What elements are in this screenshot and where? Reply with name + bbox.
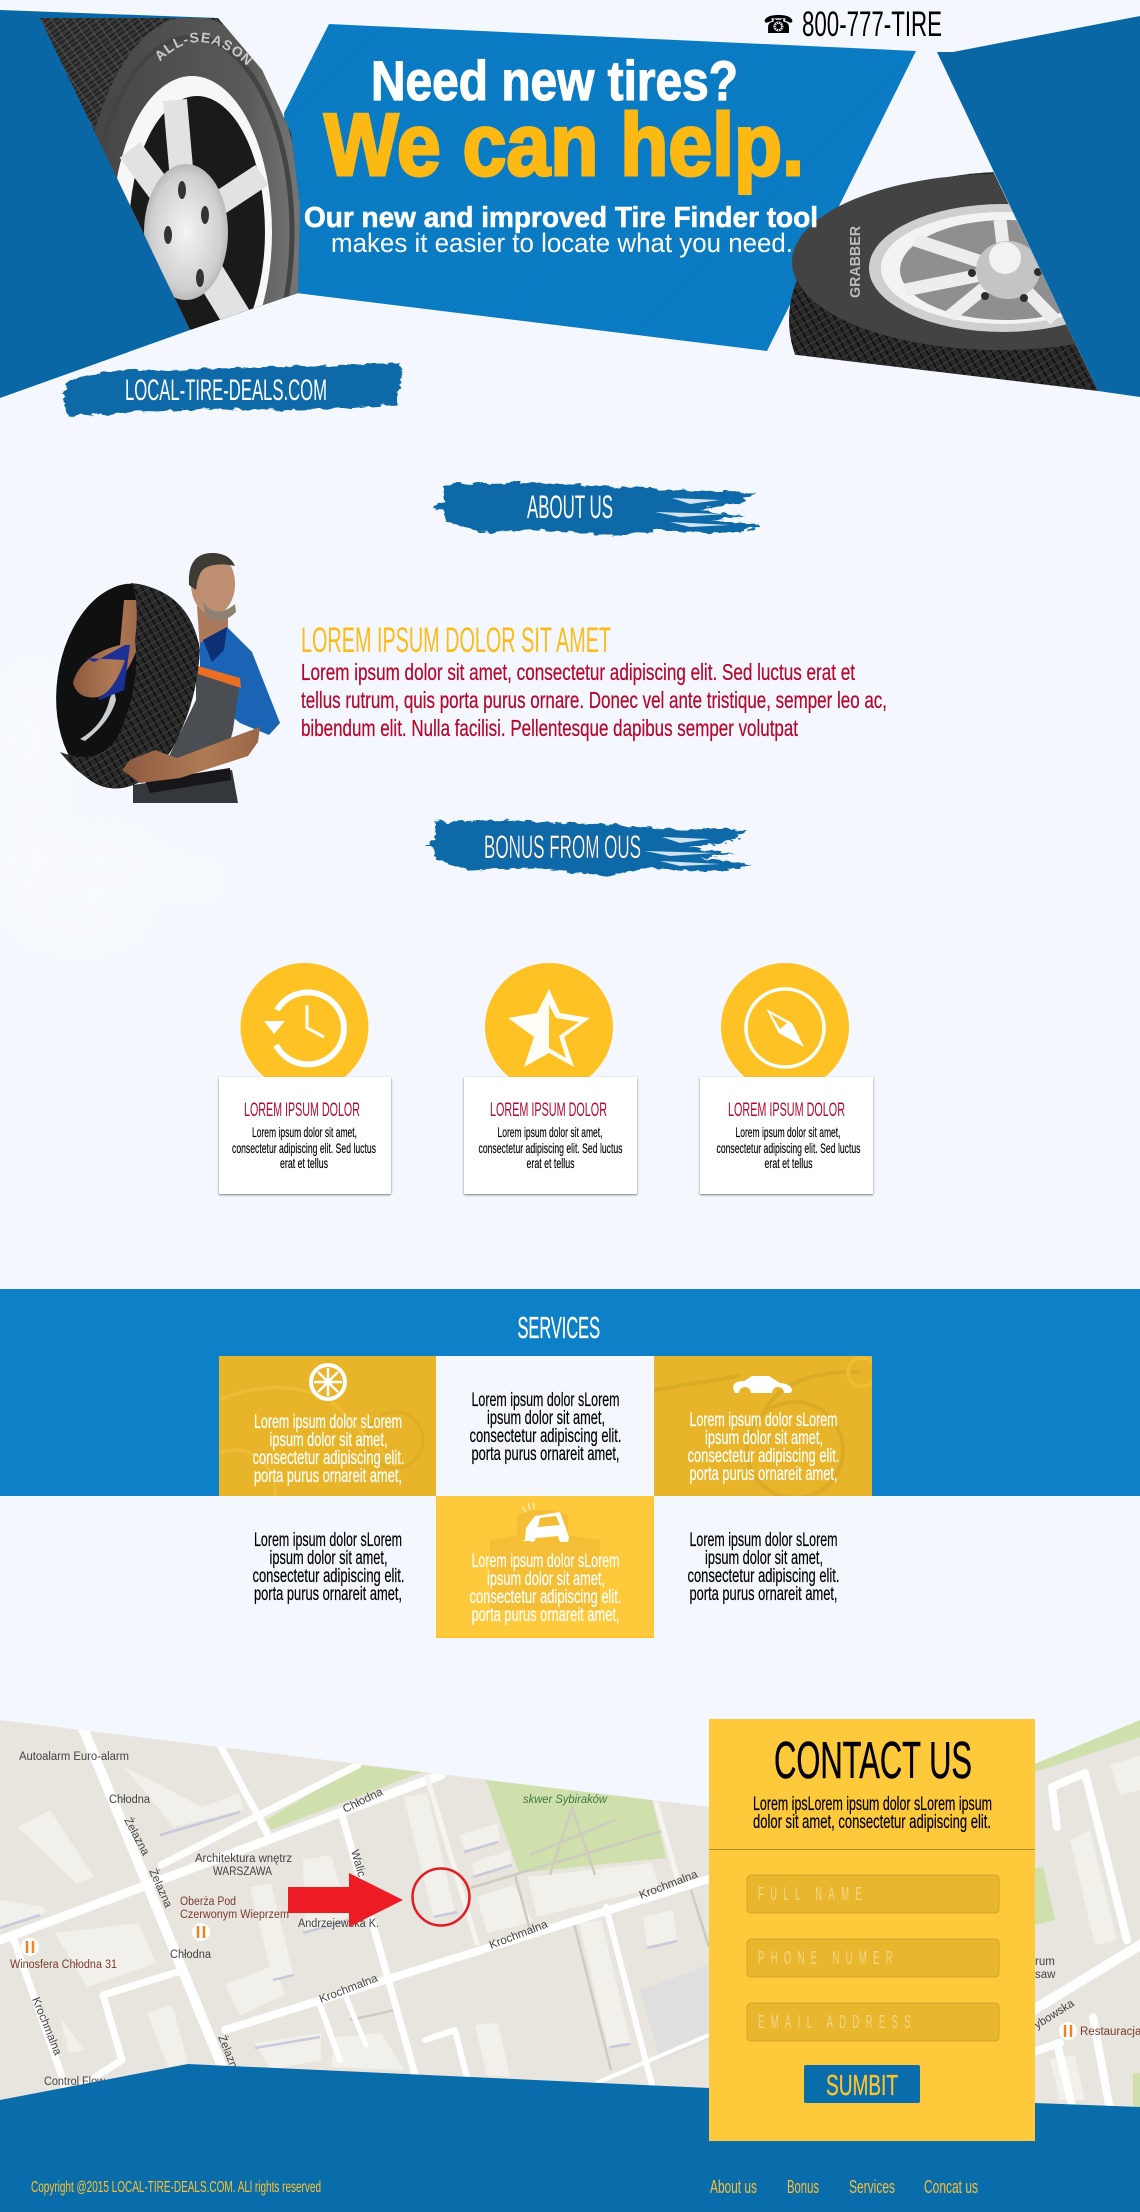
- card text: [716, 1124, 860, 1171]
- services band: [0, 1289, 1140, 1496]
- bonus card 3: [700, 963, 873, 1194]
- icon circle: clock: [240, 963, 368, 1077]
- map labels: Autoalarm Euro-alarm: [19, 1751, 129, 1763]
- card text: erat et tellus: [526, 1155, 574, 1171]
- service tile 6: porta purus ornareit amet,: [690, 1584, 838, 1605]
- about heading: LOREM IPSUM DOLOR SIT AMET: [301, 621, 611, 660]
- footer navigation: Bonus: [787, 2177, 819, 2197]
- crash icon: [522, 1503, 569, 1542]
- tile text: consectetur adipiscing elit.: [470, 1587, 622, 1608]
- headline: we can help: We can help.: [324, 95, 804, 194]
- copyright: Copyright @2015 LOCAL-TIRE-DEALS.COM. ALl rights reserved: [31, 2179, 321, 2196]
- map labels: skwer Sybiraków: [523, 1794, 608, 1806]
- tire body: [43, 575, 205, 797]
- map roads: [0, 1728, 1140, 2110]
- input: full name: [747, 1875, 999, 1913]
- map labels: Winosfera Chłodna 31: [10, 1959, 117, 1971]
- input: email address: [747, 2003, 999, 2041]
- location circle: [412, 1868, 470, 1926]
- left dark blue shape: [0, 10, 298, 398]
- card body: [464, 1077, 637, 1194]
- map labels: Walic: [348, 1849, 367, 1879]
- card body: [700, 1077, 873, 1194]
- section heading: bonus from ous: BONUS FROM OUS: [484, 829, 641, 865]
- service tile 6: ipsum dolor sit amet,: [705, 1548, 823, 1569]
- tile text: Lorem ipsum dolor sLorem: [254, 1412, 402, 1433]
- map buildings: [0, 1755, 1140, 2100]
- head: [191, 553, 235, 615]
- tile text: consectetur adipiscing elit.: [252, 1448, 404, 1469]
- service tile 5: [436, 1496, 654, 1638]
- service tile 4: [252, 1530, 404, 1605]
- tile text: porta purus ornareit amet,: [690, 1464, 838, 1485]
- right dark blue shape: [937, 16, 1140, 397]
- neck: [197, 606, 228, 650]
- map labels: Czerwonym Wieprzem: [180, 1909, 289, 1921]
- bonus card 1: [219, 963, 391, 1194]
- footer navigation: [710, 2177, 978, 2197]
- map labels: Chłodna: [170, 1949, 212, 1961]
- contact panel: [709, 1719, 1035, 2141]
- left tire photo: ALL-SEASON: [156, 32, 252, 66]
- card text: [478, 1124, 622, 1171]
- location arrow: [288, 1873, 403, 1927]
- contact text: dolor sit amet, consectetur adipiscing elit.: [753, 1812, 991, 1833]
- about text block: [301, 621, 887, 741]
- map labels: ybowska: [1032, 1997, 1077, 2032]
- tile text: consectetur adipiscing elit.: [688, 1446, 840, 1467]
- service tile 4: consectetur adipiscing elit.: [252, 1566, 404, 1587]
- arm holding tire: [73, 600, 142, 697]
- map labels: Architektura wnętrz: [195, 1853, 292, 1865]
- map labels: Chłodna: [109, 1794, 151, 1806]
- tile text: [252, 1412, 404, 1487]
- tile text: [688, 1410, 840, 1485]
- map pins: [21, 1923, 1077, 2040]
- service tile 6: consectetur adipiscing elit.: [688, 1566, 840, 1587]
- input: phone number: [747, 1939, 999, 1977]
- card text: consectetur adipiscing elit. Sed luctus: [232, 1140, 376, 1156]
- map labels: Andrzejewska K.: [298, 1918, 379, 1930]
- map building shadows: [0, 1812, 677, 2048]
- tile text: porta purus ornareit amet,: [472, 1605, 620, 1626]
- icon circle: star: [485, 963, 613, 1077]
- service tile 4: ipsum dolor sit amet,: [270, 1548, 388, 1569]
- tile text: ipsum dolor sit amet,: [705, 1428, 823, 1449]
- map labels: rum: [1035, 1956, 1055, 1968]
- hero header: [0, 5, 1140, 417]
- map paths: [350, 1808, 709, 2070]
- card text: Lorem ipsum dolor sit amet,: [498, 1124, 602, 1140]
- service tile 2: consectetur adipiscing elit.: [470, 1426, 622, 1447]
- card body: [219, 1077, 391, 1194]
- tile text: ipsum dolor sit amet,: [487, 1569, 605, 1590]
- service tile 6: [688, 1530, 840, 1605]
- wheel icon: [311, 1365, 345, 1399]
- headline: need new tires: Need new tires?: [371, 49, 738, 112]
- contact divider: [709, 1849, 1035, 1850]
- submit button: [804, 2065, 920, 2103]
- footer navigation: Concat us: [924, 2177, 978, 2197]
- right tire photo: [789, 172, 1098, 391]
- footer band: [0, 2064, 1140, 2212]
- map labels: Żelazna: [121, 1815, 152, 1858]
- tile text: [470, 1551, 622, 1626]
- faint mottled background patch: [0, 660, 226, 949]
- map labels: Żelazna: [146, 1867, 175, 1910]
- contact text: [753, 1794, 992, 1833]
- left tire photo: [40, 18, 300, 330]
- map labels: Oberża Pod: [180, 1896, 236, 1908]
- contact text: Lorem ipsLorem ipsum dolor sLorem ipsum: [753, 1794, 992, 1815]
- map: [0, 1700, 1140, 2120]
- input: phone number: PHONE NUMER: [758, 1948, 899, 1968]
- service tile 4: porta purus ornareit amet,: [254, 1584, 402, 1605]
- subheadline regular: makes it easier to locate what you need.: [331, 228, 793, 258]
- sleeve: [86, 645, 130, 700]
- card title: LOREM IPSUM DOLOR: [244, 1100, 360, 1121]
- tile text: Lorem ipsum dolor sLorem: [472, 1551, 620, 1572]
- bonus card 2: [464, 963, 637, 1194]
- card text: erat et tellus: [764, 1155, 812, 1171]
- card text: [232, 1124, 376, 1171]
- tile text: Lorem ipsum dolor sLorem: [690, 1410, 838, 1431]
- tile text: ipsum dolor sit amet,: [270, 1430, 388, 1451]
- services heading: SERVICES: [518, 1310, 600, 1345]
- map labels: Restauracja: [1080, 2026, 1140, 2038]
- card text: consectetur adipiscing elit. Sed luctus: [478, 1140, 622, 1156]
- footer navigation: About us: [710, 2177, 757, 2197]
- input: full name: FULL NAME: [758, 1884, 868, 1904]
- map labels: Krochmalna: [488, 1918, 550, 1952]
- map labels: Krochmalna: [318, 1972, 380, 2006]
- map labels: [10, 1751, 1140, 2088]
- section heading: about us: ABOUT US: [527, 489, 613, 525]
- service tile 3: [654, 1356, 876, 1498]
- card text: Lorem ipsum dolor sit amet,: [252, 1124, 357, 1140]
- trousers and belt: [133, 770, 238, 803]
- section heading: about us: [434, 482, 761, 536]
- card text: Lorem ipsum dolor sit amet,: [736, 1124, 840, 1140]
- brand brush: [64, 363, 402, 416]
- service tile 1: [219, 1356, 436, 1496]
- white rim sliver: [80, 690, 116, 741]
- map labels: Control Flow: [44, 2076, 106, 2088]
- card title: LOREM IPSUM DOLOR: [728, 1100, 845, 1121]
- service tile 2: ipsum dolor sit amet,: [487, 1408, 605, 1429]
- map labels: Krochmalna: [29, 1996, 64, 2058]
- shirt: [200, 627, 280, 735]
- about photo: mechanic with tire: [43, 553, 280, 803]
- about paragraph: tellus rutrum, quis porta purus ornare. Donec vel ante tristique, semper leo ac,: [301, 687, 887, 713]
- map labels: Chłodna: [341, 1786, 385, 1816]
- services section: [0, 1289, 1140, 1638]
- map labels: saw: [1035, 1969, 1056, 1981]
- brand name: LOCAL-TIRE-DEALS.COM: [125, 374, 327, 407]
- icon circle: compass: [721, 963, 849, 1077]
- map labels: Krochmalna: [638, 1868, 700, 1902]
- input: email address: EMAIL ADDRESS: [758, 2012, 917, 2032]
- contact heading: CONTACT US: [774, 1732, 972, 1790]
- service tile 2: [436, 1356, 654, 1496]
- card text: erat et tellus: [280, 1155, 328, 1171]
- card title: LOREM IPSUM DOLOR: [490, 1100, 607, 1121]
- tire tread: [60, 583, 200, 788]
- map labels: WARSZAWA: [213, 1866, 272, 1878]
- phone number: 800-777-TIRE: [802, 5, 942, 44]
- footer navigation: Services: [849, 2177, 895, 2197]
- section heading: bonus from ous: [425, 820, 752, 876]
- service tile 4: Lorem ipsum dolor sLorem: [254, 1530, 402, 1551]
- forearm and hand: [122, 727, 260, 783]
- right tire photo: GRABBER: [847, 226, 864, 298]
- submit button: SUMBIT: [826, 2070, 898, 2102]
- tile text: porta purus ornareit amet,: [254, 1466, 402, 1487]
- service tile 2: porta purus ornareit amet,: [472, 1444, 620, 1465]
- apron: [160, 672, 240, 775]
- service tile 2: Lorem ipsum dolor sLorem: [472, 1390, 620, 1411]
- map parks: [266, 1720, 1140, 2110]
- about paragraph: Lorem ipsum dolor sit amet, consectetur adipiscing elit. Sed luctus erat et: [301, 659, 855, 685]
- about paragraph: bibendum elit. Nulla facilisi. Pellentesque dapibus semper volutpat: [301, 715, 798, 741]
- map plaza: [640, 1965, 709, 2060]
- central blue panel: [284, 24, 916, 351]
- phone icon: ☎: [763, 10, 794, 39]
- car icon: [733, 1376, 792, 1393]
- card text: consectetur adipiscing elit. Sed luctus: [716, 1140, 860, 1156]
- service tile 6: Lorem ipsum dolor sLorem: [690, 1530, 838, 1551]
- subheadline bold: Our new and improved Tire Finder tool: [304, 202, 818, 234]
- map labels: Żelazna: [215, 2033, 243, 2077]
- about paragraph: [301, 659, 887, 741]
